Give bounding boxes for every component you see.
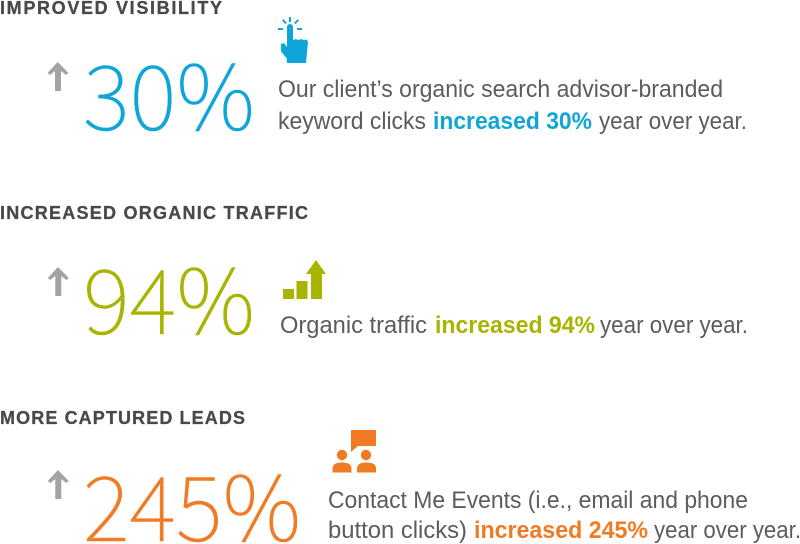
section: improved visibility	[0, 0, 747, 156]
body text: organic search clicks: keyword clicks	[278, 108, 426, 135]
icon: pointing hand	[278, 17, 308, 63]
body text: organic search clicks: year over year.	[599, 108, 747, 135]
heading: more captured leads: MORE CAPTURED LEADS	[0, 408, 245, 428]
section: more captured leads	[0, 408, 800, 544]
body text: organic traffic	[280, 312, 748, 339]
body text: organic traffic: increased 94%	[435, 312, 595, 339]
icon: up arrow	[48, 62, 68, 91]
icon: two people with speech bubble	[332, 430, 376, 472]
body text: contact me events: Contact Me Events (i.e., email and phone	[328, 487, 748, 514]
body text: contact me events: button clicks)	[328, 517, 467, 544]
icon: rising bars with arrow	[283, 260, 326, 299]
body text: contact me events	[328, 487, 800, 544]
heading: increased organic traffic: INCREASED ORGANIC TRAFFIC	[0, 203, 308, 223]
icon: up arrow	[48, 267, 69, 296]
body text: organic search clicks	[278, 76, 747, 135]
icon: up arrow	[48, 470, 69, 499]
stat: 94%: 94%	[83, 230, 255, 360]
stat: 30%: 30%	[83, 26, 255, 156]
body text: organic search clicks: Our client’s organic search advisor-branded	[278, 76, 723, 103]
section: increased organic traffic	[0, 203, 748, 360]
body text: organic traffic: year over year.	[600, 312, 748, 339]
body text: organic search clicks: increased 30%	[433, 108, 592, 135]
body text: organic traffic: Organic traffic	[280, 312, 427, 339]
body text: contact me events: increased 245%	[474, 517, 648, 544]
